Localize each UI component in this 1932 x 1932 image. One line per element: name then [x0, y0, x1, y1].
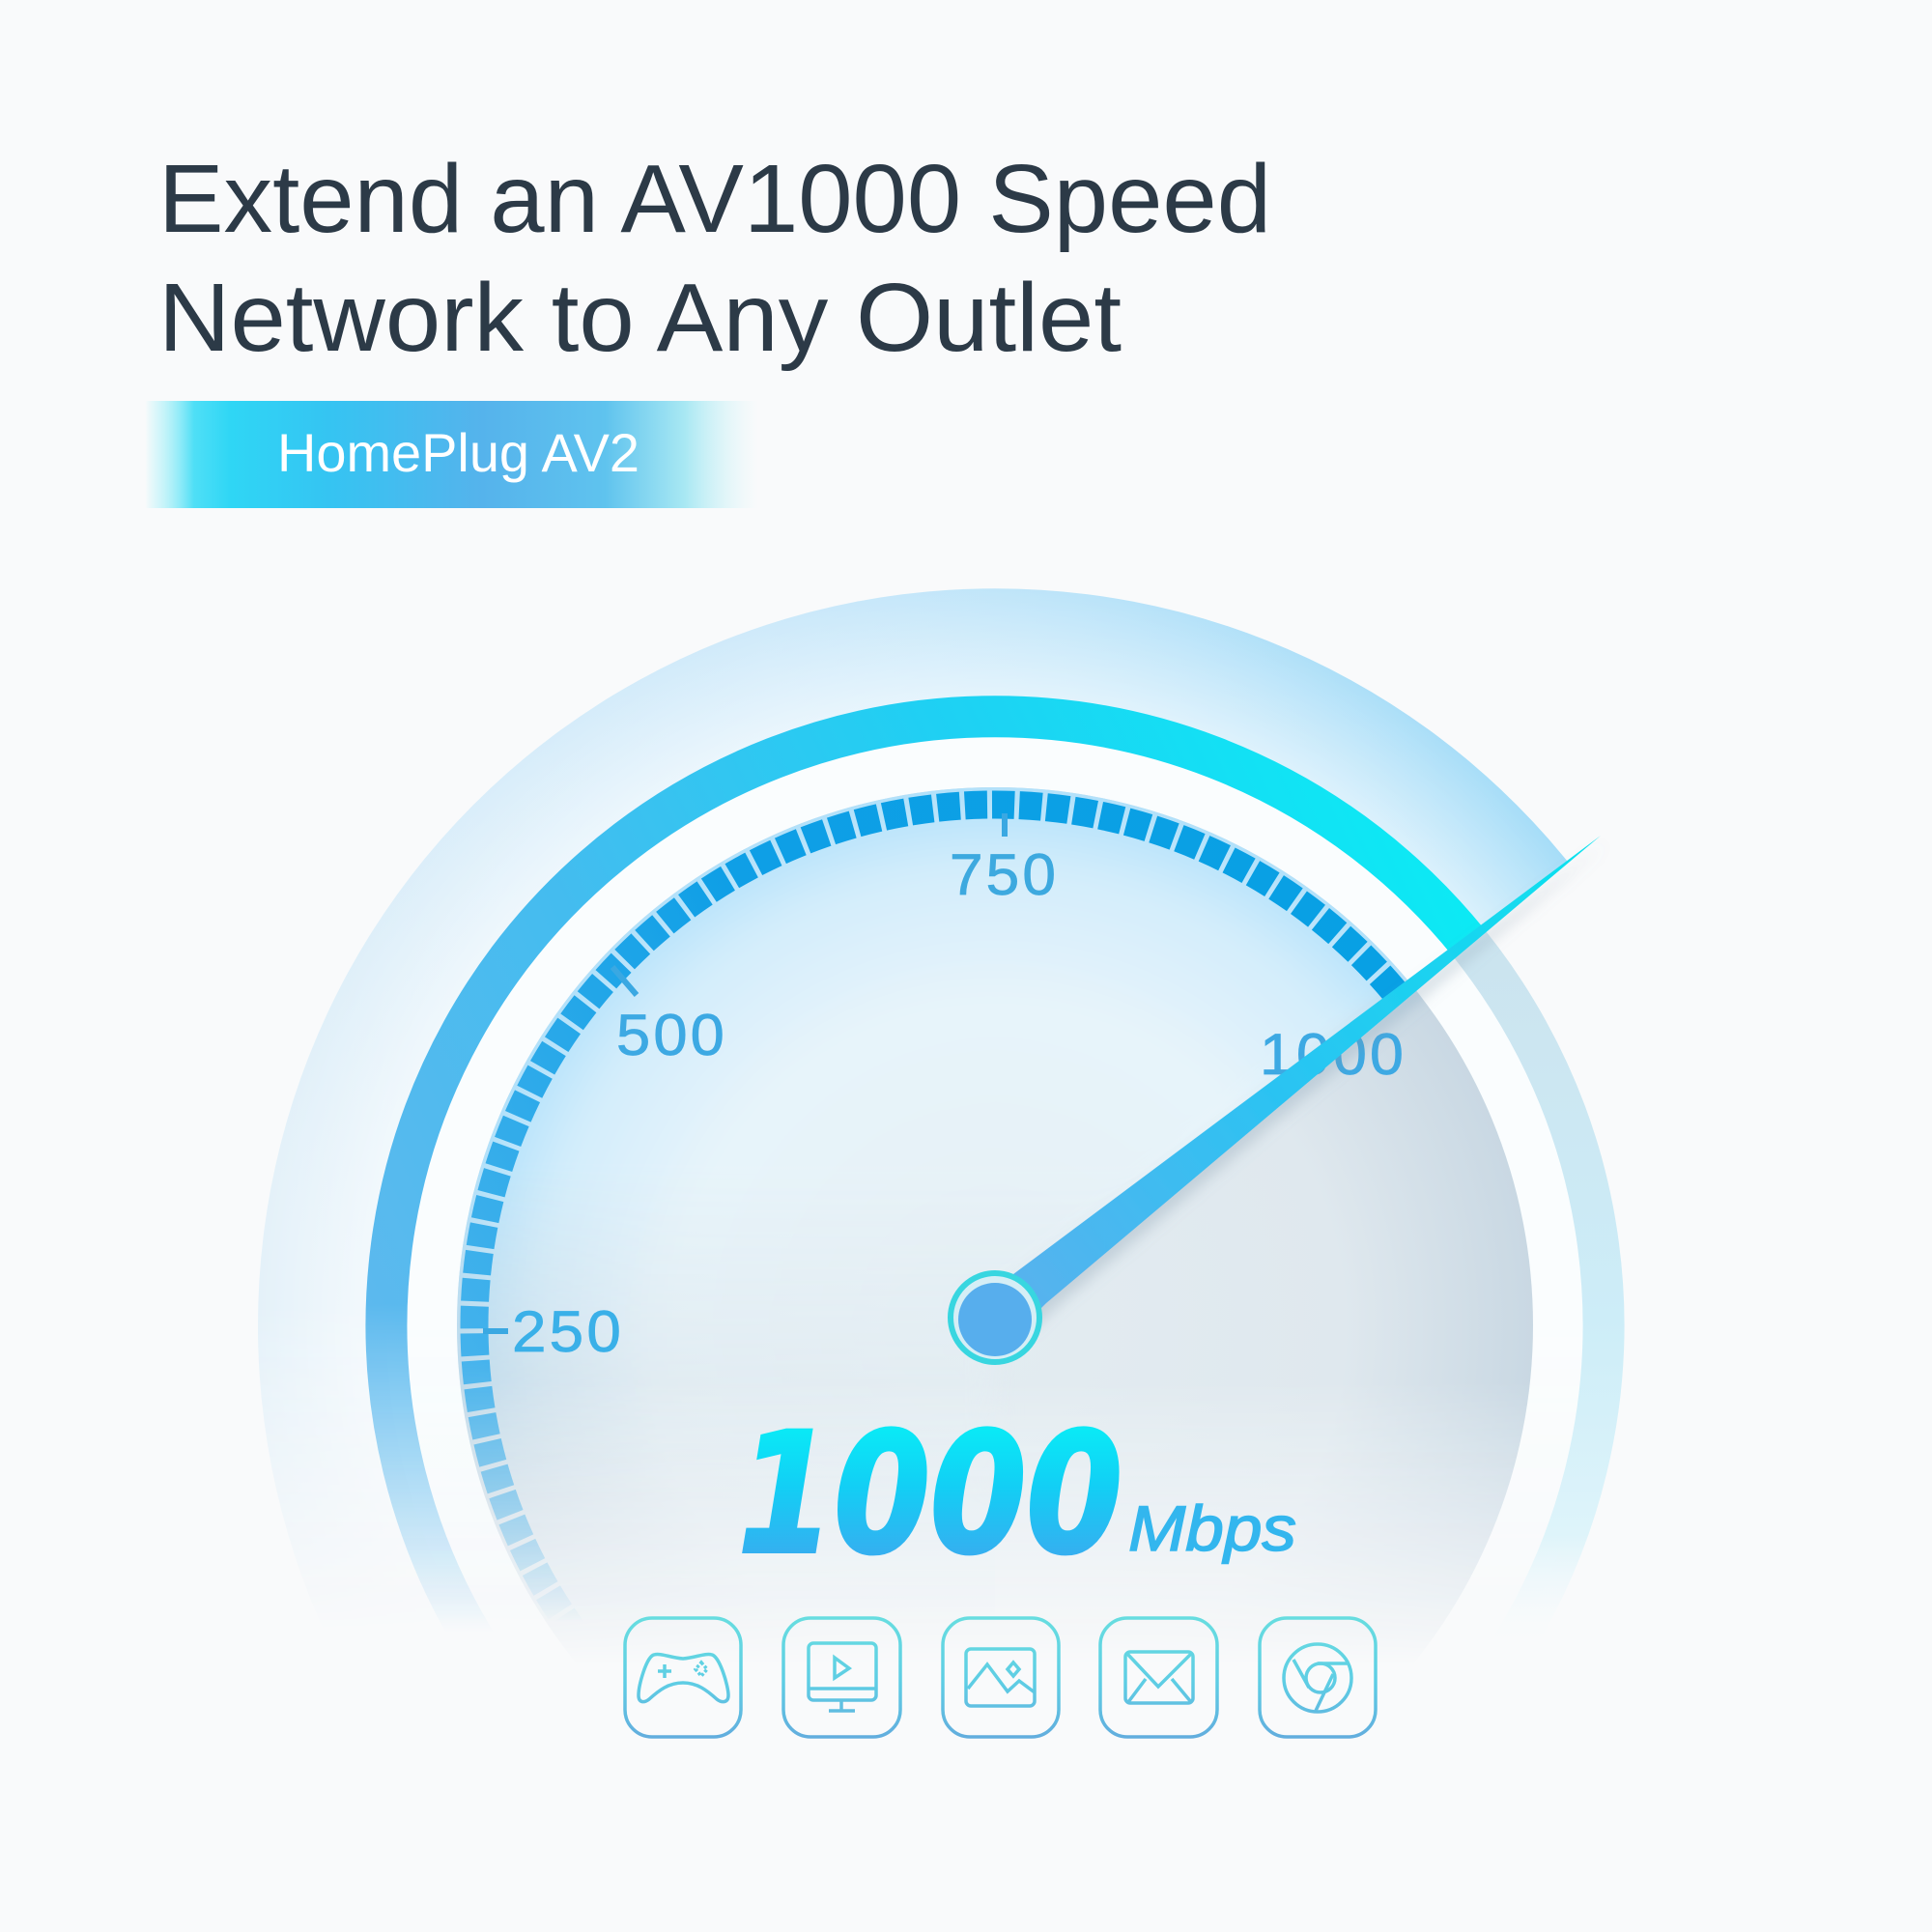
icon: browser: [1260, 1618, 1376, 1737]
title: Extend an AV1000 Speed: [158, 145, 1271, 253]
label 500: 500: [616, 1003, 727, 1067]
white inner band: [434, 737, 1447, 1225]
speed readout: 1000: 1000: [738, 1397, 1122, 1591]
label 1000: 1000: [1260, 1022, 1406, 1087]
title: [158, 145, 1271, 372]
title: Network to Any Outlet: [158, 264, 1122, 372]
tick mark 500: [612, 967, 637, 995]
needle: [1009, 836, 1601, 1325]
pale remainder ring: [1455, 931, 1625, 1586]
label 250: 250: [512, 1299, 624, 1364]
segmented tick arc: [460, 790, 1405, 1611]
needle pivot: [951, 1273, 1039, 1362]
tick mark 750: [1002, 813, 1008, 837]
icon row: [625, 1618, 1376, 1737]
speedometer gauge: [258, 588, 1625, 1621]
outer halo band: [258, 588, 1567, 1505]
badge: HomePlug AV2: HomePlug AV2: [277, 422, 639, 483]
dial face: [457, 787, 1533, 1617]
icon: picture: [943, 1618, 1059, 1737]
icon: game controller: [625, 1618, 741, 1737]
tick mark 250: [483, 1328, 508, 1334]
speed unit: Mbps: Mbps: [1128, 1492, 1296, 1564]
cyan progress ring: [365, 696, 1481, 1615]
badge: HomePlug AV2: [145, 401, 758, 508]
icon: video monitor: [783, 1618, 900, 1737]
icon: mail envelope: [1100, 1618, 1217, 1737]
label 750: 750: [950, 842, 1059, 907]
